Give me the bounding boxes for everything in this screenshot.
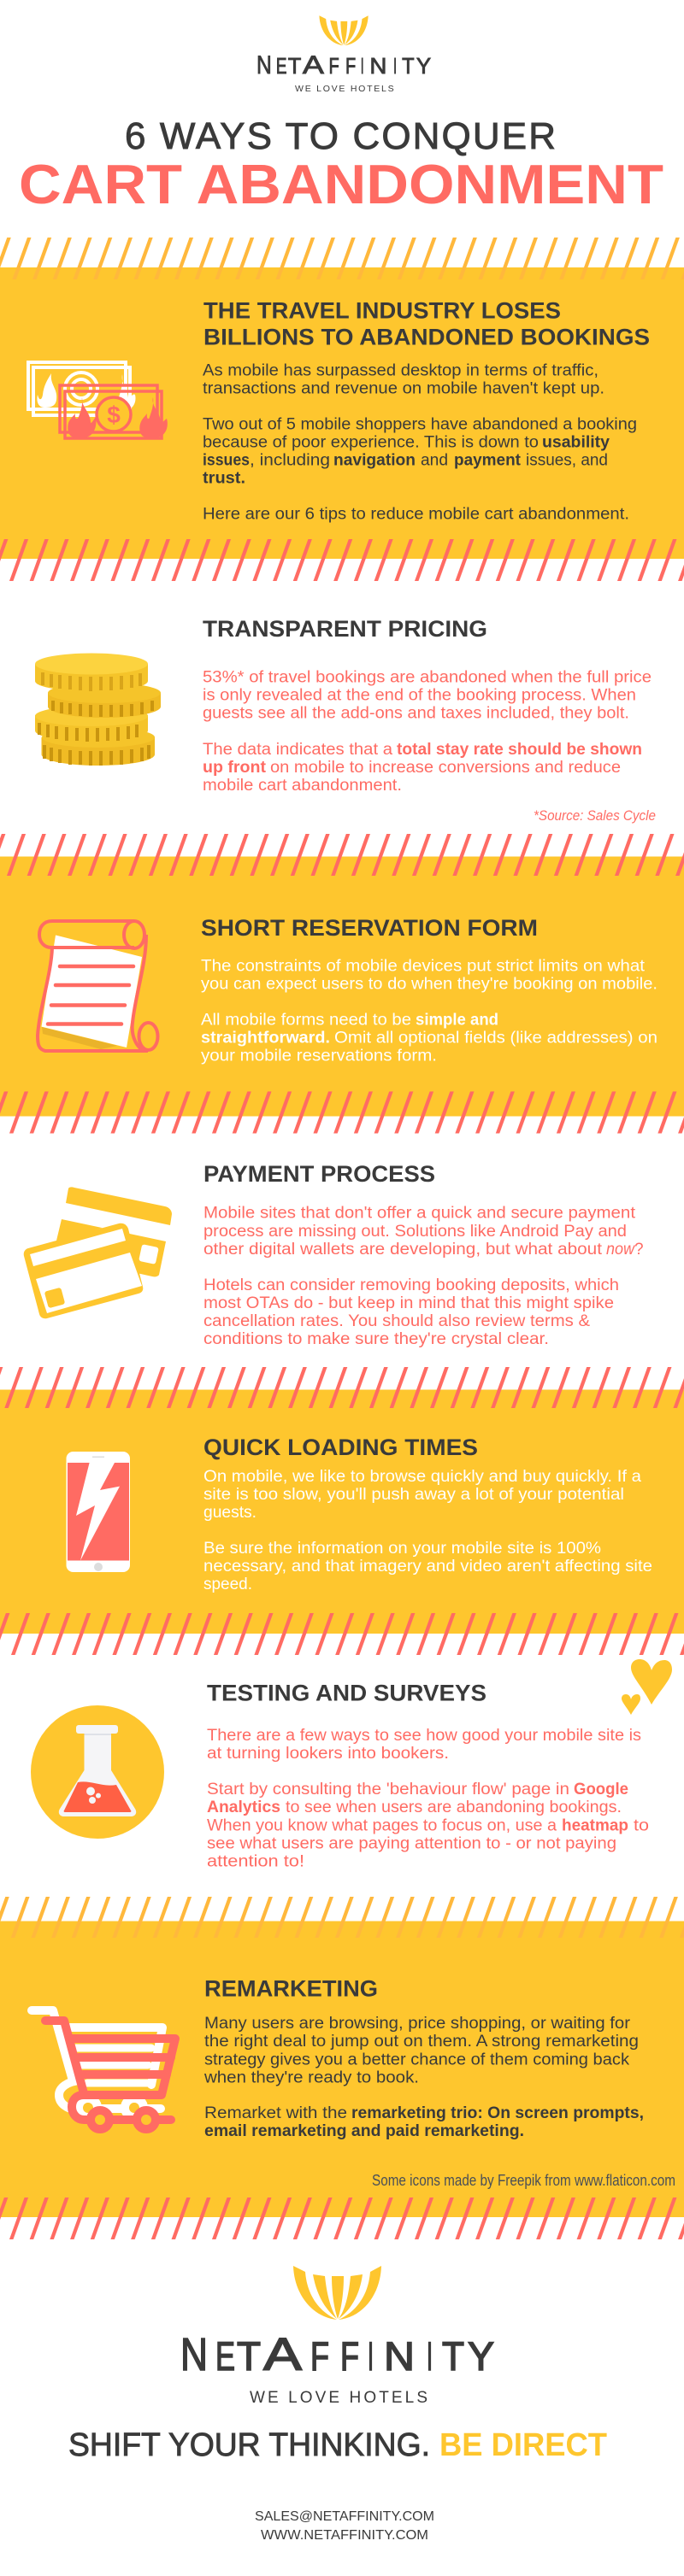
icon: burning money bbox=[28, 362, 168, 438]
text block: issues bbox=[203, 451, 250, 470]
text block: most OTAs do - but keep in mind that this might spike bbox=[203, 1294, 614, 1312]
logo wordmark: I bbox=[368, 2333, 374, 2379]
text block: Google bbox=[574, 1781, 628, 1799]
text block: , including bbox=[250, 451, 330, 470]
panel: payment process bbox=[24, 1161, 644, 1348]
text block: Analytics bbox=[207, 1799, 280, 1816]
logo wordmark: N bbox=[384, 2333, 415, 2379]
text block: your mobile reservations form. bbox=[201, 1047, 437, 1065]
text block: email remarketing and paid remarketing. bbox=[204, 2122, 524, 2140]
logo wordmark: I bbox=[393, 53, 397, 79]
text block bbox=[203, 1205, 644, 1348]
logo wordmark: T bbox=[442, 2333, 464, 2379]
logo wordmark: F bbox=[345, 53, 356, 79]
text block: at turning lookers into bookers. bbox=[207, 1745, 449, 1763]
logo wordmark: F bbox=[310, 2333, 329, 2379]
heading: BILLIONS TO ABANDONED BOOKINGS bbox=[203, 325, 650, 350]
text block: 53%* of travel bookings are abandoned when the full price bbox=[203, 668, 652, 687]
text block: Mobile sites that don't offer a quick and secure payment bbox=[203, 1205, 636, 1222]
panel: remarketing bbox=[0, 1897, 684, 2239]
icon: shopping cart bbox=[32, 2010, 175, 2129]
text block: navigation bbox=[333, 451, 416, 470]
text block: now bbox=[606, 1241, 635, 1259]
text block: straightforward. bbox=[201, 1029, 330, 1047]
panel: quick loading times bbox=[0, 1367, 684, 1655]
text block: total stay rate should be shown bbox=[397, 741, 642, 759]
text block: process are missing out. Solutions like Android Pay and bbox=[203, 1223, 627, 1241]
text block: to bbox=[634, 1816, 649, 1835]
panel: intro bbox=[0, 238, 684, 581]
heading: REMARKETING bbox=[204, 1975, 378, 2001]
text block: the right deal to jump out on them. A strong remarketing bbox=[204, 2033, 639, 2051]
heading: TESTING AND SURVEYS bbox=[207, 1680, 486, 1705]
icon: hearts bbox=[622, 1659, 672, 1715]
text block: trust. bbox=[203, 470, 245, 487]
logo wordmark: A bbox=[263, 2329, 302, 2380]
logo tagline: WE LOVE HOTELS bbox=[250, 2389, 428, 2407]
icon: scroll bbox=[38, 921, 157, 1051]
icon: phone with lightning bbox=[67, 1452, 130, 1572]
text block: attention to! bbox=[207, 1852, 304, 1871]
text block: Here are our 6 tips to reduce mobile cart abandonment. bbox=[203, 506, 629, 523]
text block: usability bbox=[542, 434, 610, 451]
icon: credit cards bbox=[24, 1187, 172, 1318]
logo wordmark: T bbox=[288, 53, 301, 79]
logo wordmark: I bbox=[427, 2333, 433, 2379]
logo wordmark: N bbox=[256, 51, 272, 79]
text block: Hotels can consider removing booking deposits, which bbox=[203, 1276, 619, 1294]
text block: There are a few ways to see how good your mobile site is bbox=[207, 1727, 641, 1745]
text block: up front bbox=[203, 759, 267, 777]
text block bbox=[203, 668, 652, 795]
text block: payment bbox=[454, 451, 522, 470]
logo wordmark: F bbox=[340, 2333, 359, 2379]
text block: on mobile to increase conversions and reduce bbox=[270, 759, 621, 777]
text block: The data indicates that a bbox=[203, 741, 392, 759]
text block: to see when users are abandoning bookings. bbox=[286, 1799, 622, 1816]
title line 2: CART ABANDONMENT bbox=[19, 153, 663, 215]
text block: All mobile forms need to be bbox=[201, 1012, 411, 1029]
text block: because of poor experience. This is down to bbox=[203, 434, 539, 451]
text block: guests. bbox=[203, 1504, 256, 1522]
heading bbox=[203, 297, 650, 350]
logo wordmark: N bbox=[180, 2329, 208, 2380]
icon: burning money: $ bbox=[107, 402, 121, 428]
text block: Start by consulting the 'behaviour flow' page in bbox=[207, 1781, 569, 1799]
logo wordmark: A bbox=[303, 51, 324, 79]
text block bbox=[207, 1727, 649, 1871]
text block: mobile cart abandonment. bbox=[203, 777, 402, 795]
logo wordmark: Y bbox=[416, 53, 431, 79]
text block: issues, and bbox=[526, 451, 608, 470]
contact details: SALES@NETAFFINITY.COM bbox=[255, 2509, 434, 2524]
text block: Remarket with the bbox=[204, 2104, 347, 2122]
heading: QUICK LOADING TIMES bbox=[203, 1435, 478, 1460]
text block bbox=[203, 1468, 652, 1593]
text block: remarketing trio: On screen prompts, bbox=[351, 2104, 644, 2122]
text block: The constraints of mobile devices put strict limits on what bbox=[201, 957, 646, 976]
text block: transactions and revenue on mobile haven't kept up. bbox=[203, 379, 604, 398]
icon: flask bbox=[31, 1705, 164, 1839]
text block: heatmap bbox=[562, 1816, 628, 1835]
text block: site is too slow, you'll push away a lot of your potential bbox=[203, 1486, 624, 1504]
logo wordmark: I bbox=[361, 53, 364, 79]
text block: is only revealed at the end of the booking process. When bbox=[203, 687, 636, 704]
logo wordmark: T bbox=[237, 2333, 261, 2379]
text block bbox=[203, 2015, 644, 2140]
logo: NetAffinity header bbox=[256, 15, 431, 94]
panel: short reservation form bbox=[0, 834, 684, 1133]
text block: As mobile has surpassed desktop in terms of traffic, bbox=[203, 362, 598, 379]
heading: TRANSPARENT PRICING bbox=[203, 616, 487, 642]
text block: Many users are browsing, price shopping, or waiting for bbox=[204, 2015, 631, 2033]
text block: ? bbox=[634, 1241, 644, 1259]
text block: guests see all the add-ons and taxes included, they bolt. bbox=[203, 704, 629, 723]
text block: when they're ready to book. bbox=[203, 2069, 419, 2086]
heading: THE TRAVEL INDUSTRY LOSES bbox=[203, 297, 561, 323]
logo wordmark: E bbox=[215, 2333, 235, 2379]
logo wordmark: E bbox=[276, 53, 287, 79]
contact details bbox=[255, 2509, 434, 2543]
heading: SHORT RESERVATION FORM bbox=[201, 915, 538, 941]
text block: simple and bbox=[416, 1012, 498, 1029]
text block: strategy gives you a better chance of them coming back bbox=[204, 2051, 630, 2069]
contact details: WWW.NETAFFINITY.COM bbox=[261, 2528, 428, 2543]
footer bbox=[68, 2266, 607, 2543]
text block bbox=[203, 362, 637, 523]
text block bbox=[201, 957, 657, 1065]
text block: cancellation rates. You should also review terms & bbox=[203, 1312, 590, 1330]
logo wordmark: Y bbox=[468, 2333, 494, 2379]
logo wordmark: F bbox=[329, 53, 339, 79]
text block: and bbox=[421, 451, 448, 470]
icon: logo fan bbox=[319, 15, 369, 45]
text block: you can expect users to do when they're booking on mobile. bbox=[201, 976, 657, 993]
text block: speed. bbox=[203, 1576, 252, 1593]
panel: testing and surveys bbox=[31, 1659, 672, 1871]
text block: other digital wallets are developing, but what about bbox=[203, 1241, 603, 1259]
logo tagline: WE LOVE HOTELS bbox=[295, 84, 394, 94]
title bbox=[19, 115, 663, 215]
text block: necessary, and that imagery and video aren't affecting site bbox=[203, 1558, 652, 1576]
heading: PAYMENT PROCESS bbox=[203, 1161, 435, 1187]
text block: Two out of 5 mobile shoppers have abandoned a booking bbox=[203, 415, 637, 434]
icon: logo fan bbox=[293, 2266, 381, 2320]
text block: On mobile, we like to browse quickly and buy quickly. If a bbox=[203, 1468, 641, 1486]
logo wordmark: N bbox=[369, 53, 386, 79]
slogan bbox=[68, 2427, 607, 2463]
slogan: BE DIRECT bbox=[439, 2427, 607, 2463]
text block: Omit all optional fields (like addresses) on bbox=[334, 1029, 657, 1047]
logo wordmark: T bbox=[402, 53, 415, 79]
text block: see what users are paying attention to - or not paying bbox=[207, 1835, 616, 1852]
source note: *Source: Sales Cycle bbox=[534, 807, 656, 824]
slogan: SHIFT YOUR THINKING. bbox=[68, 2427, 430, 2463]
text block: Be sure the information on your mobile site is 100% bbox=[203, 1540, 601, 1558]
icon: coins bbox=[35, 653, 161, 766]
text block: conditions to make sure they're crystal clear. bbox=[203, 1330, 549, 1348]
panel: transparent pricing bbox=[35, 616, 656, 824]
title line 1: 6 WAYS TO CONQUER bbox=[125, 115, 556, 157]
text block: When you know what pages to focus on, use a bbox=[207, 1816, 557, 1835]
logo: NetAffinity footer bbox=[180, 2266, 494, 2407]
